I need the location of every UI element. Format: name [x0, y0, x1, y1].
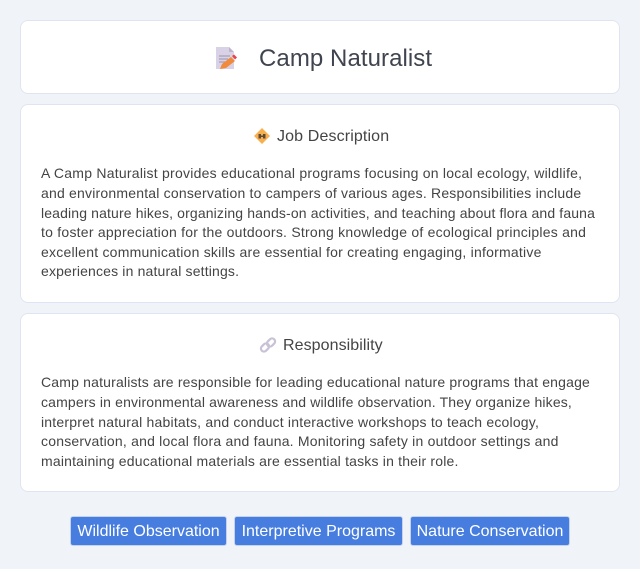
- text block: responsibility: [41, 374, 590, 469]
- icon: diamond sign: [254, 128, 270, 144]
- panel: responsibility: [20, 313, 620, 492]
- tag: wildlife observation: Wildlife Observation: [77, 523, 220, 540]
- tag: nature conservation: Nature Conservation: [417, 523, 563, 540]
- text block: job description: excellent communication skills are essential for creating engaging, informative: [41, 244, 542, 260]
- icon: link: [260, 337, 276, 353]
- tag: interpretive programs: [234, 516, 403, 546]
- tag: interpretive programs: Interpretive Programs: [242, 523, 395, 540]
- tag: wildlife observation: [70, 516, 227, 546]
- text block: job description: A Camp Naturalist provides educational programs focusing on local ecology, wildlife,: [41, 165, 582, 181]
- text block: responsibility: interpret natural habitats, and conduct interactive workshops to teach ecology,: [41, 414, 539, 430]
- title: Camp Naturalist: [259, 45, 432, 72]
- text block: responsibility: Camp naturalists are responsible for leading educational nature programs that engage: [41, 374, 590, 390]
- tag: nature conservation: [410, 516, 570, 546]
- text block: job description: [41, 165, 595, 279]
- heading: responsibility: Responsibility: [283, 337, 383, 354]
- heading: job description: Job Description: [277, 128, 389, 145]
- text block: job description: leading nature hikes, organizing hands-on activities, and teaching about flora and fauna: [41, 205, 595, 221]
- text block: job description: to foster appreciation for the outdoors. Strong knowledge of ecological principles and: [41, 224, 586, 240]
- text block: responsibility: maintaining educational materials are essential tasks in their role.: [41, 453, 459, 469]
- text block: job description: experiences in natural settings.: [41, 263, 239, 279]
- text block: responsibility: campers in environmental awareness and wildlife observation. They organize hikes,: [41, 394, 572, 410]
- icon: memo with pencil: [216, 47, 237, 69]
- text block: job description: and environmental conservation to campers of various ages. Responsibilities include: [41, 185, 581, 201]
- panel: title: [20, 20, 620, 94]
- text block: responsibility: conservation, and local flora and fauna. Monitoring safety in outdoor settings and: [41, 433, 559, 449]
- panel: job description: [20, 104, 620, 303]
